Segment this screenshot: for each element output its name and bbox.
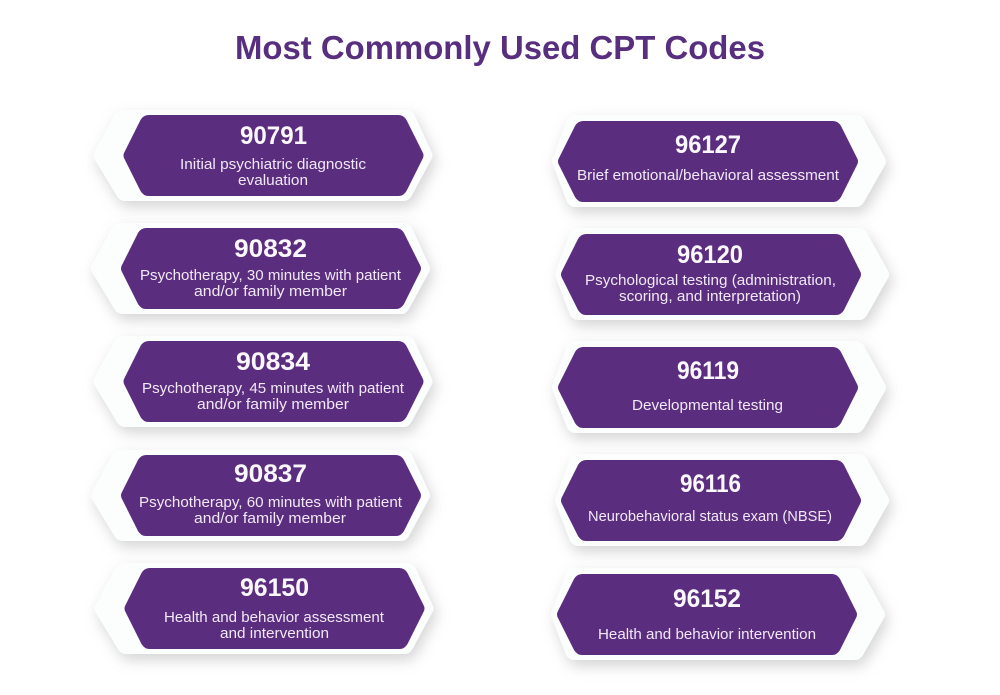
card: 90837: and/or family member — [194, 511, 346, 527]
card: 90837 — [91, 450, 430, 541]
card: 90832 — [91, 223, 430, 314]
card: 96116 — [555, 454, 889, 546]
card: 90832: and/or family member — [194, 284, 347, 300]
card: 96120: 96120 — [677, 241, 743, 269]
card: 96116: Neurobehavioral status exam (NBSE) — [588, 509, 832, 525]
card: 96127 — [552, 115, 886, 207]
card: 96152: 96152 — [673, 585, 741, 613]
card: 90791: 90791 — [240, 122, 307, 150]
card: 90791: Initial psychiatric diagnostic — [180, 157, 366, 173]
card: 90834: and/or family member — [197, 397, 349, 413]
card: 96116: 96116 — [680, 470, 741, 498]
card: 96150: 96150 — [240, 574, 309, 602]
card: 96119: Developmental testing — [632, 398, 783, 414]
card: 96120 — [555, 228, 889, 320]
card: 96152 — [551, 568, 885, 660]
card: 96150: and intervention — [220, 626, 329, 642]
card: 90834: 90834 — [236, 348, 310, 376]
card: 90834: Psychotherapy, 45 minutes with patient — [142, 381, 404, 397]
card: 96127: 96127 — [675, 131, 741, 159]
card: 96119: 96119 — [677, 357, 739, 385]
card: 96150 — [94, 563, 434, 654]
card: 90832: 90832 — [234, 235, 307, 263]
card: 96150: Health and behavior assessment — [164, 610, 384, 626]
card: 96120: Psychological testing (administration, — [585, 273, 836, 289]
card: 96152: Health and behavior intervention — [598, 627, 816, 643]
card: 96127: Brief emotional/behavioral assessment — [577, 168, 839, 184]
card: 90791 — [94, 110, 432, 201]
card: 96119 — [552, 341, 886, 433]
card: 96120: scoring, and interpretation) — [619, 289, 801, 305]
card: 90791: evaluation — [238, 173, 308, 189]
card: 90837: 90837 — [234, 460, 307, 488]
card: 90832: Psychotherapy, 30 minutes with patient — [140, 268, 401, 284]
card: 90837: Psychotherapy, 60 minutes with patient — [139, 495, 402, 511]
card: 90834 — [94, 336, 432, 427]
title: Most Commonly Used CPT Codes — [235, 29, 765, 66]
